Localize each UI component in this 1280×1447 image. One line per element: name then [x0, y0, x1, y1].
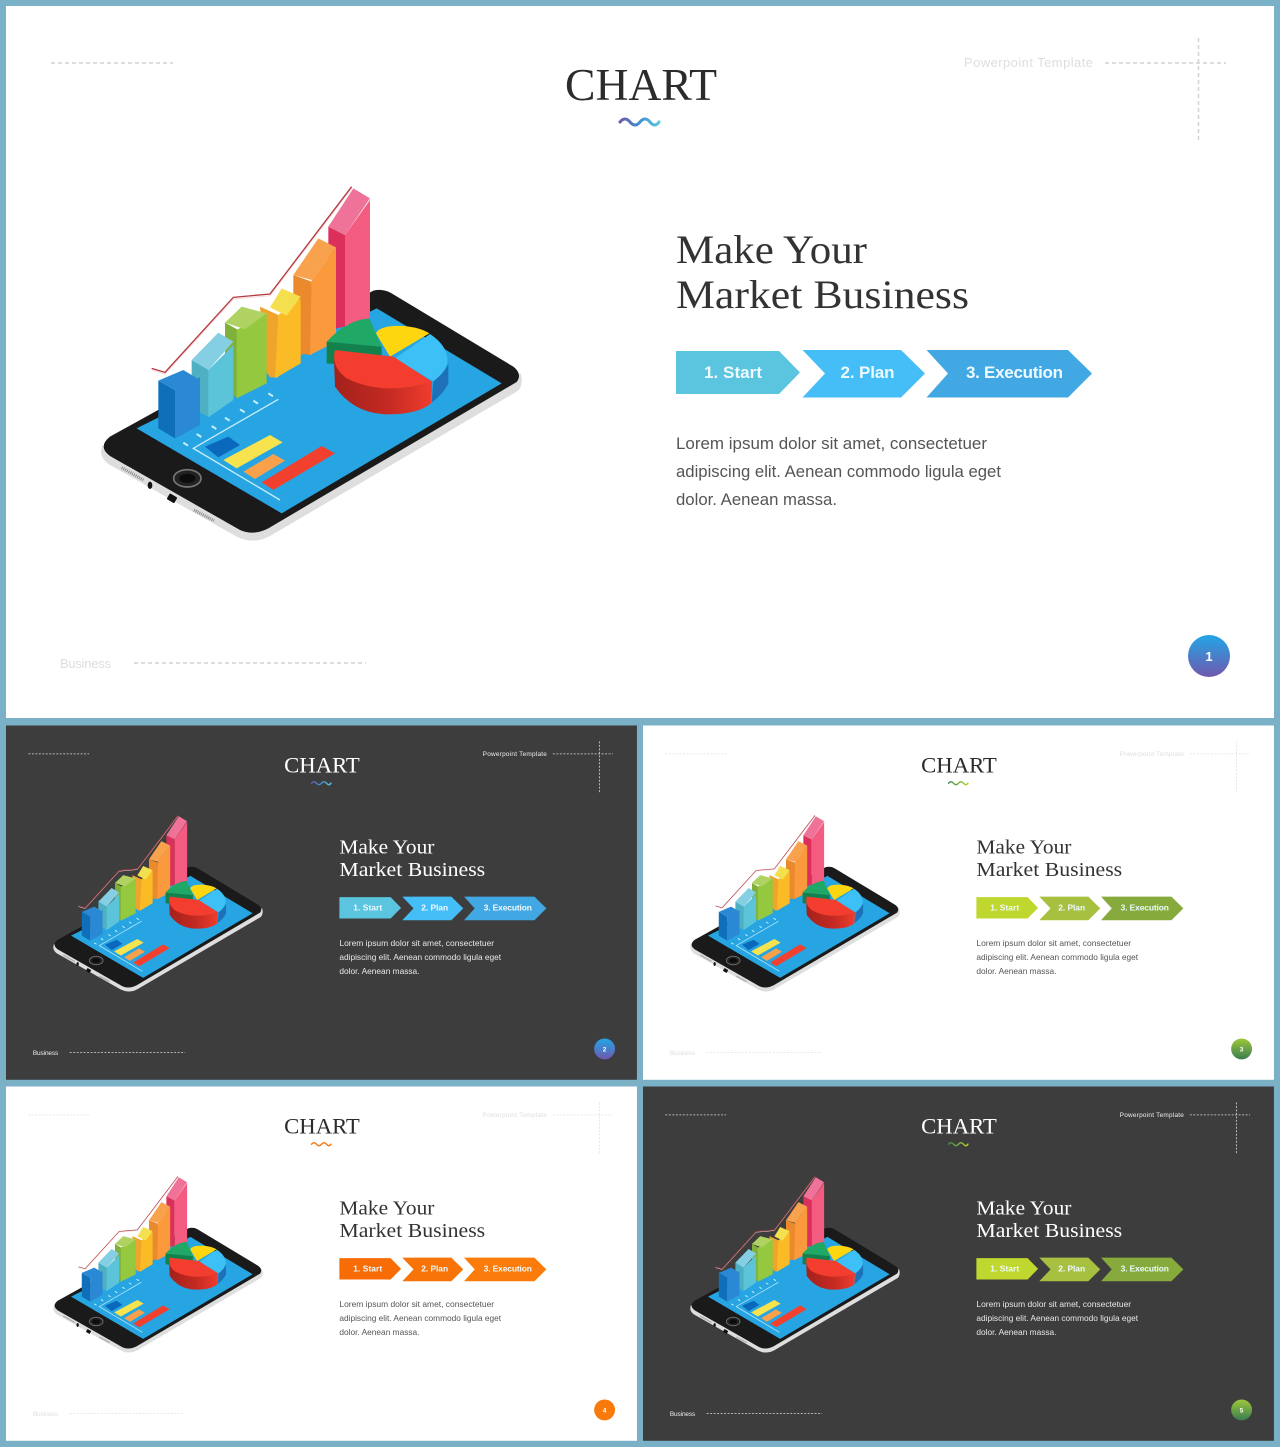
- heading: [676, 227, 969, 317]
- body text: dolor. Aenean massa.: [339, 1327, 419, 1337]
- heading: Market Business: [339, 1220, 485, 1242]
- heading: Make Your: [676, 227, 867, 272]
- heading: [976, 1197, 1122, 1242]
- chevron steps: [339, 897, 546, 920]
- slide 1: main white slide: [6, 6, 1274, 718]
- heading: [339, 1197, 485, 1242]
- heading: Market Business: [339, 859, 485, 881]
- slide 5: dark slide green: [643, 1086, 1274, 1441]
- page number badge: [594, 1038, 615, 1059]
- body text: [339, 1299, 502, 1337]
- chevron steps: [339, 1258, 546, 1281]
- heading: [976, 836, 1122, 881]
- page number badge: 5: [1240, 1407, 1244, 1414]
- heading: Market Business: [976, 859, 1122, 881]
- top right label: Powerpoint Template: [1120, 1112, 1184, 1119]
- top right label: Powerpoint Template: [483, 1112, 547, 1119]
- slide 2: dark slide blue: [6, 725, 637, 1080]
- bar: pink: [328, 188, 370, 330]
- bar: blue: [158, 370, 200, 438]
- chevron steps: [976, 897, 1183, 920]
- pie chart: [327, 318, 448, 414]
- chevron steps: 2. Plan: [421, 903, 448, 913]
- heading: Make Your: [339, 1197, 435, 1219]
- title: CHART: [921, 1113, 997, 1138]
- chevron steps: [676, 350, 1092, 398]
- body text: adipiscing elit. Aenean commodo ligula eget: [976, 1313, 1139, 1323]
- small horizontal bars: [205, 435, 335, 490]
- body text: adipiscing elit. Aenean commodo ligula eget: [676, 462, 1001, 481]
- footer label: Business: [670, 1050, 695, 1057]
- tablet body: [101, 290, 522, 541]
- chevron steps: 2. Plan: [840, 363, 894, 382]
- chevron steps: 3. Execution: [1121, 1264, 1169, 1274]
- heading: Make Your: [339, 836, 435, 858]
- body text: Lorem ipsum dolor sit amet, consectetuer: [976, 938, 1131, 948]
- body text: Lorem ipsum dolor sit amet, consectetuer: [339, 938, 494, 948]
- trend line: [152, 187, 352, 374]
- heading: Market Business: [976, 1220, 1122, 1242]
- heading: Make Your: [976, 836, 1072, 858]
- bar: green: [225, 307, 267, 398]
- body text: adipiscing elit. Aenean commodo ligula eget: [339, 1313, 502, 1323]
- title squiggle: [312, 1143, 331, 1146]
- illustration: [53, 815, 263, 992]
- footer label: Business: [33, 1411, 58, 1418]
- body text: [976, 938, 1139, 976]
- page number badge: [1231, 1399, 1252, 1420]
- top right label: Powerpoint Template: [964, 55, 1093, 70]
- footer label: Business: [33, 1050, 58, 1057]
- slide 3: white slide green: [643, 725, 1274, 1080]
- page number badge: 3: [1240, 1046, 1244, 1053]
- bar: teal: [192, 333, 233, 417]
- chevron steps: [976, 1258, 1183, 1281]
- illustration: [690, 815, 900, 992]
- body text: adipiscing elit. Aenean commodo ligula eget: [976, 952, 1139, 962]
- title: CHART: [921, 752, 997, 777]
- title: CHART: [284, 752, 360, 777]
- body text: dolor. Aenean massa.: [676, 490, 837, 509]
- top right label: Powerpoint Template: [1120, 751, 1184, 758]
- body text: [676, 434, 1001, 509]
- chevron steps: 3. Execution: [966, 363, 1063, 382]
- footer label: Business: [670, 1411, 695, 1418]
- heading: Market Business: [676, 272, 969, 317]
- chevron steps: 3. Execution: [1121, 903, 1169, 913]
- slide 4: white slide orange: [6, 1086, 637, 1441]
- chevron steps: 1. Start: [704, 363, 762, 382]
- body text: Lorem ipsum dolor sit amet, consectetuer: [339, 1299, 494, 1309]
- page number badge: [1188, 635, 1230, 677]
- title: CHART: [284, 1113, 360, 1138]
- illustration: [53, 1176, 263, 1353]
- body text: dolor. Aenean massa.: [976, 1327, 1056, 1337]
- page number badge: 1: [1205, 649, 1213, 664]
- illustration: isometric tablet with charts: [101, 187, 522, 541]
- page number badge: [594, 1399, 615, 1420]
- body text: Lorem ipsum dolor sit amet, consectetuer: [976, 1299, 1131, 1309]
- chevron steps: 1. Start: [990, 903, 1019, 913]
- top right label: Powerpoint Template: [483, 751, 547, 758]
- body text: dolor. Aenean massa.: [339, 966, 419, 976]
- ports: [122, 468, 214, 521]
- bar: orange: [293, 238, 336, 358]
- chevron steps: 1. Start: [353, 903, 382, 913]
- bar: yellow: [260, 288, 301, 378]
- body text: Lorem ipsum dolor sit amet, consectetuer: [676, 434, 987, 453]
- body text: dolor. Aenean massa.: [976, 966, 1056, 976]
- chevron steps: 1. Start: [353, 1264, 382, 1274]
- body text: [339, 938, 502, 976]
- chevron steps: 2. Plan: [1058, 903, 1085, 913]
- chevron steps: 2. Plan: [421, 1264, 448, 1274]
- title squiggle: [620, 119, 659, 125]
- home button: [174, 470, 201, 487]
- axis lines: [183, 393, 280, 500]
- page number badge: 4: [603, 1407, 607, 1414]
- chevron steps: 3. Execution: [484, 903, 532, 913]
- page number badge: 2: [603, 1046, 607, 1053]
- page number badge: [1231, 1038, 1252, 1059]
- heading: [339, 836, 485, 881]
- footer label: Business: [60, 656, 112, 671]
- heading: Make Your: [976, 1197, 1072, 1219]
- body text: adipiscing elit. Aenean commodo ligula eget: [339, 952, 502, 962]
- chevron steps: 3. Execution: [484, 1264, 532, 1274]
- chevron steps: 1. Start: [990, 1264, 1019, 1274]
- title: CHART: [565, 60, 717, 110]
- title squiggle: [949, 1143, 968, 1146]
- illustration: [690, 1176, 900, 1353]
- chevron steps: 2. Plan: [1058, 1264, 1085, 1274]
- body text: [976, 1299, 1139, 1337]
- title squiggle: [312, 782, 331, 785]
- title squiggle: [949, 782, 968, 785]
